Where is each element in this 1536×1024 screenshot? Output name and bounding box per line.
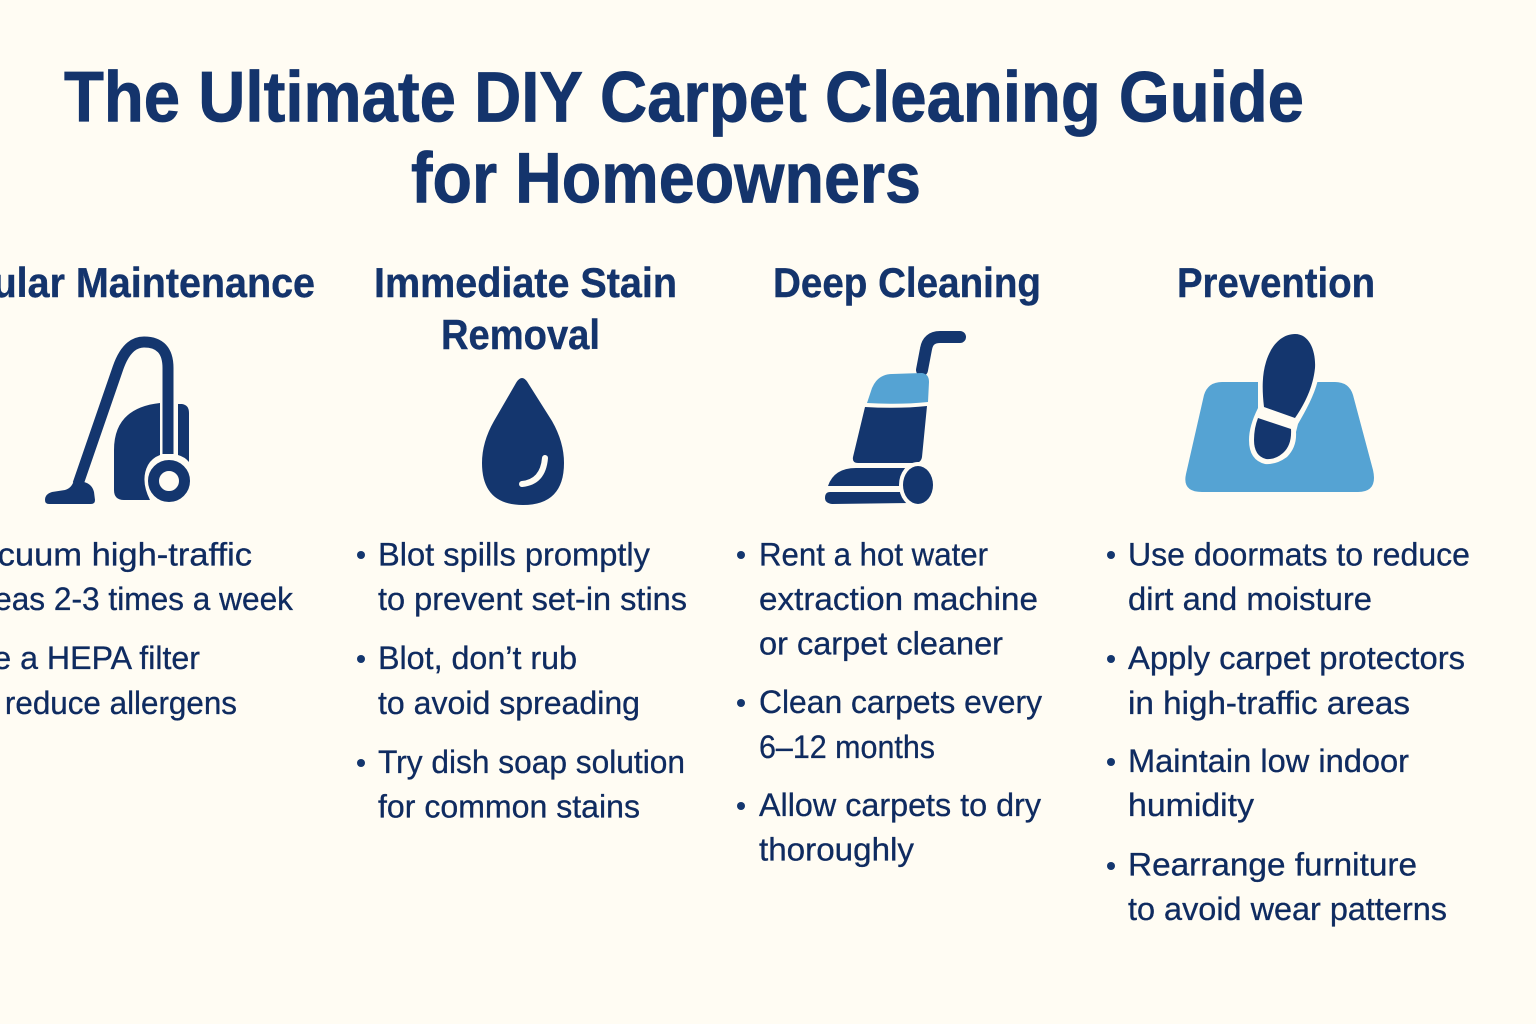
bullet list: immediate stain removal: Blot, don’t rub [378,640,577,676]
bullet list: prevention: Use doormats to reduce [1128,536,1470,572]
title: The Ultimate DIY Carpet Cleaning Guide [64,58,1304,138]
bullet list: deep cleaning [737,536,1042,868]
bullet list: deep cleaning: or carpet cleaner [759,626,1003,662]
title [64,58,1304,218]
icon: carpet cleaning machine [825,337,960,504]
icon: vacuum cleaner [45,342,189,504]
bullet list: prevention: Maintain low indoor [1128,743,1409,779]
heading: prevention: Prevention [1177,259,1375,306]
bullet list: deep cleaning: thoroughly [759,832,914,868]
bullet list: prevention: dirt and moisture [1128,581,1372,617]
bullet list: prevention: Rearrange furniture [1128,846,1417,882]
bullet list: deep cleaning: 6–12 months [759,729,935,765]
bullet list: immediate stain removal [357,536,687,824]
heading: immediate stain removal: Immediate Stain [374,259,677,306]
heading: deep cleaning: Deep Cleaning [773,259,1041,306]
bullet list: deep cleaning: Clean carpets every [759,684,1042,720]
bullet list: prevention [1107,536,1470,927]
icon: footprint on doormat [1185,329,1374,492]
bullet list: immediate stain removal: to avoid spreading [378,685,640,721]
bullet list: prevention: humidity [1128,787,1254,823]
bullet list: deep cleaning: Rent a hot water [759,536,988,572]
bullet list: immediate stain removal: for common stains [378,788,640,824]
panel: immediate stain removal [357,259,687,824]
bullet list: regular maintenance [0,536,294,721]
panel: prevention [1107,259,1470,927]
bullet list: deep cleaning: Allow carpets to dry [759,787,1041,823]
bullet list: prevention: Apply carpet protectors [1128,640,1465,676]
panel: deep cleaning [737,259,1042,868]
bullet list: prevention: in high-traffic areas [1128,685,1410,721]
bullet list: deep cleaning: extraction machine [759,581,1038,617]
bullet list: immediate stain removal: Try dish soap solution [378,744,685,780]
bullet list: prevention: to avoid wear patterns [1128,891,1447,927]
bullet list: immediate stain removal: to prevent set-in stins [378,581,687,617]
icon: water drop [482,378,564,505]
title: for Homeowners [411,140,921,218]
heading: immediate stain removal [374,259,677,358]
heading: immediate stain removal: Removal [441,311,600,358]
panel: regular maintenance [0,259,315,721]
bullet list: immediate stain removal: Blot spills promptly [378,536,650,572]
